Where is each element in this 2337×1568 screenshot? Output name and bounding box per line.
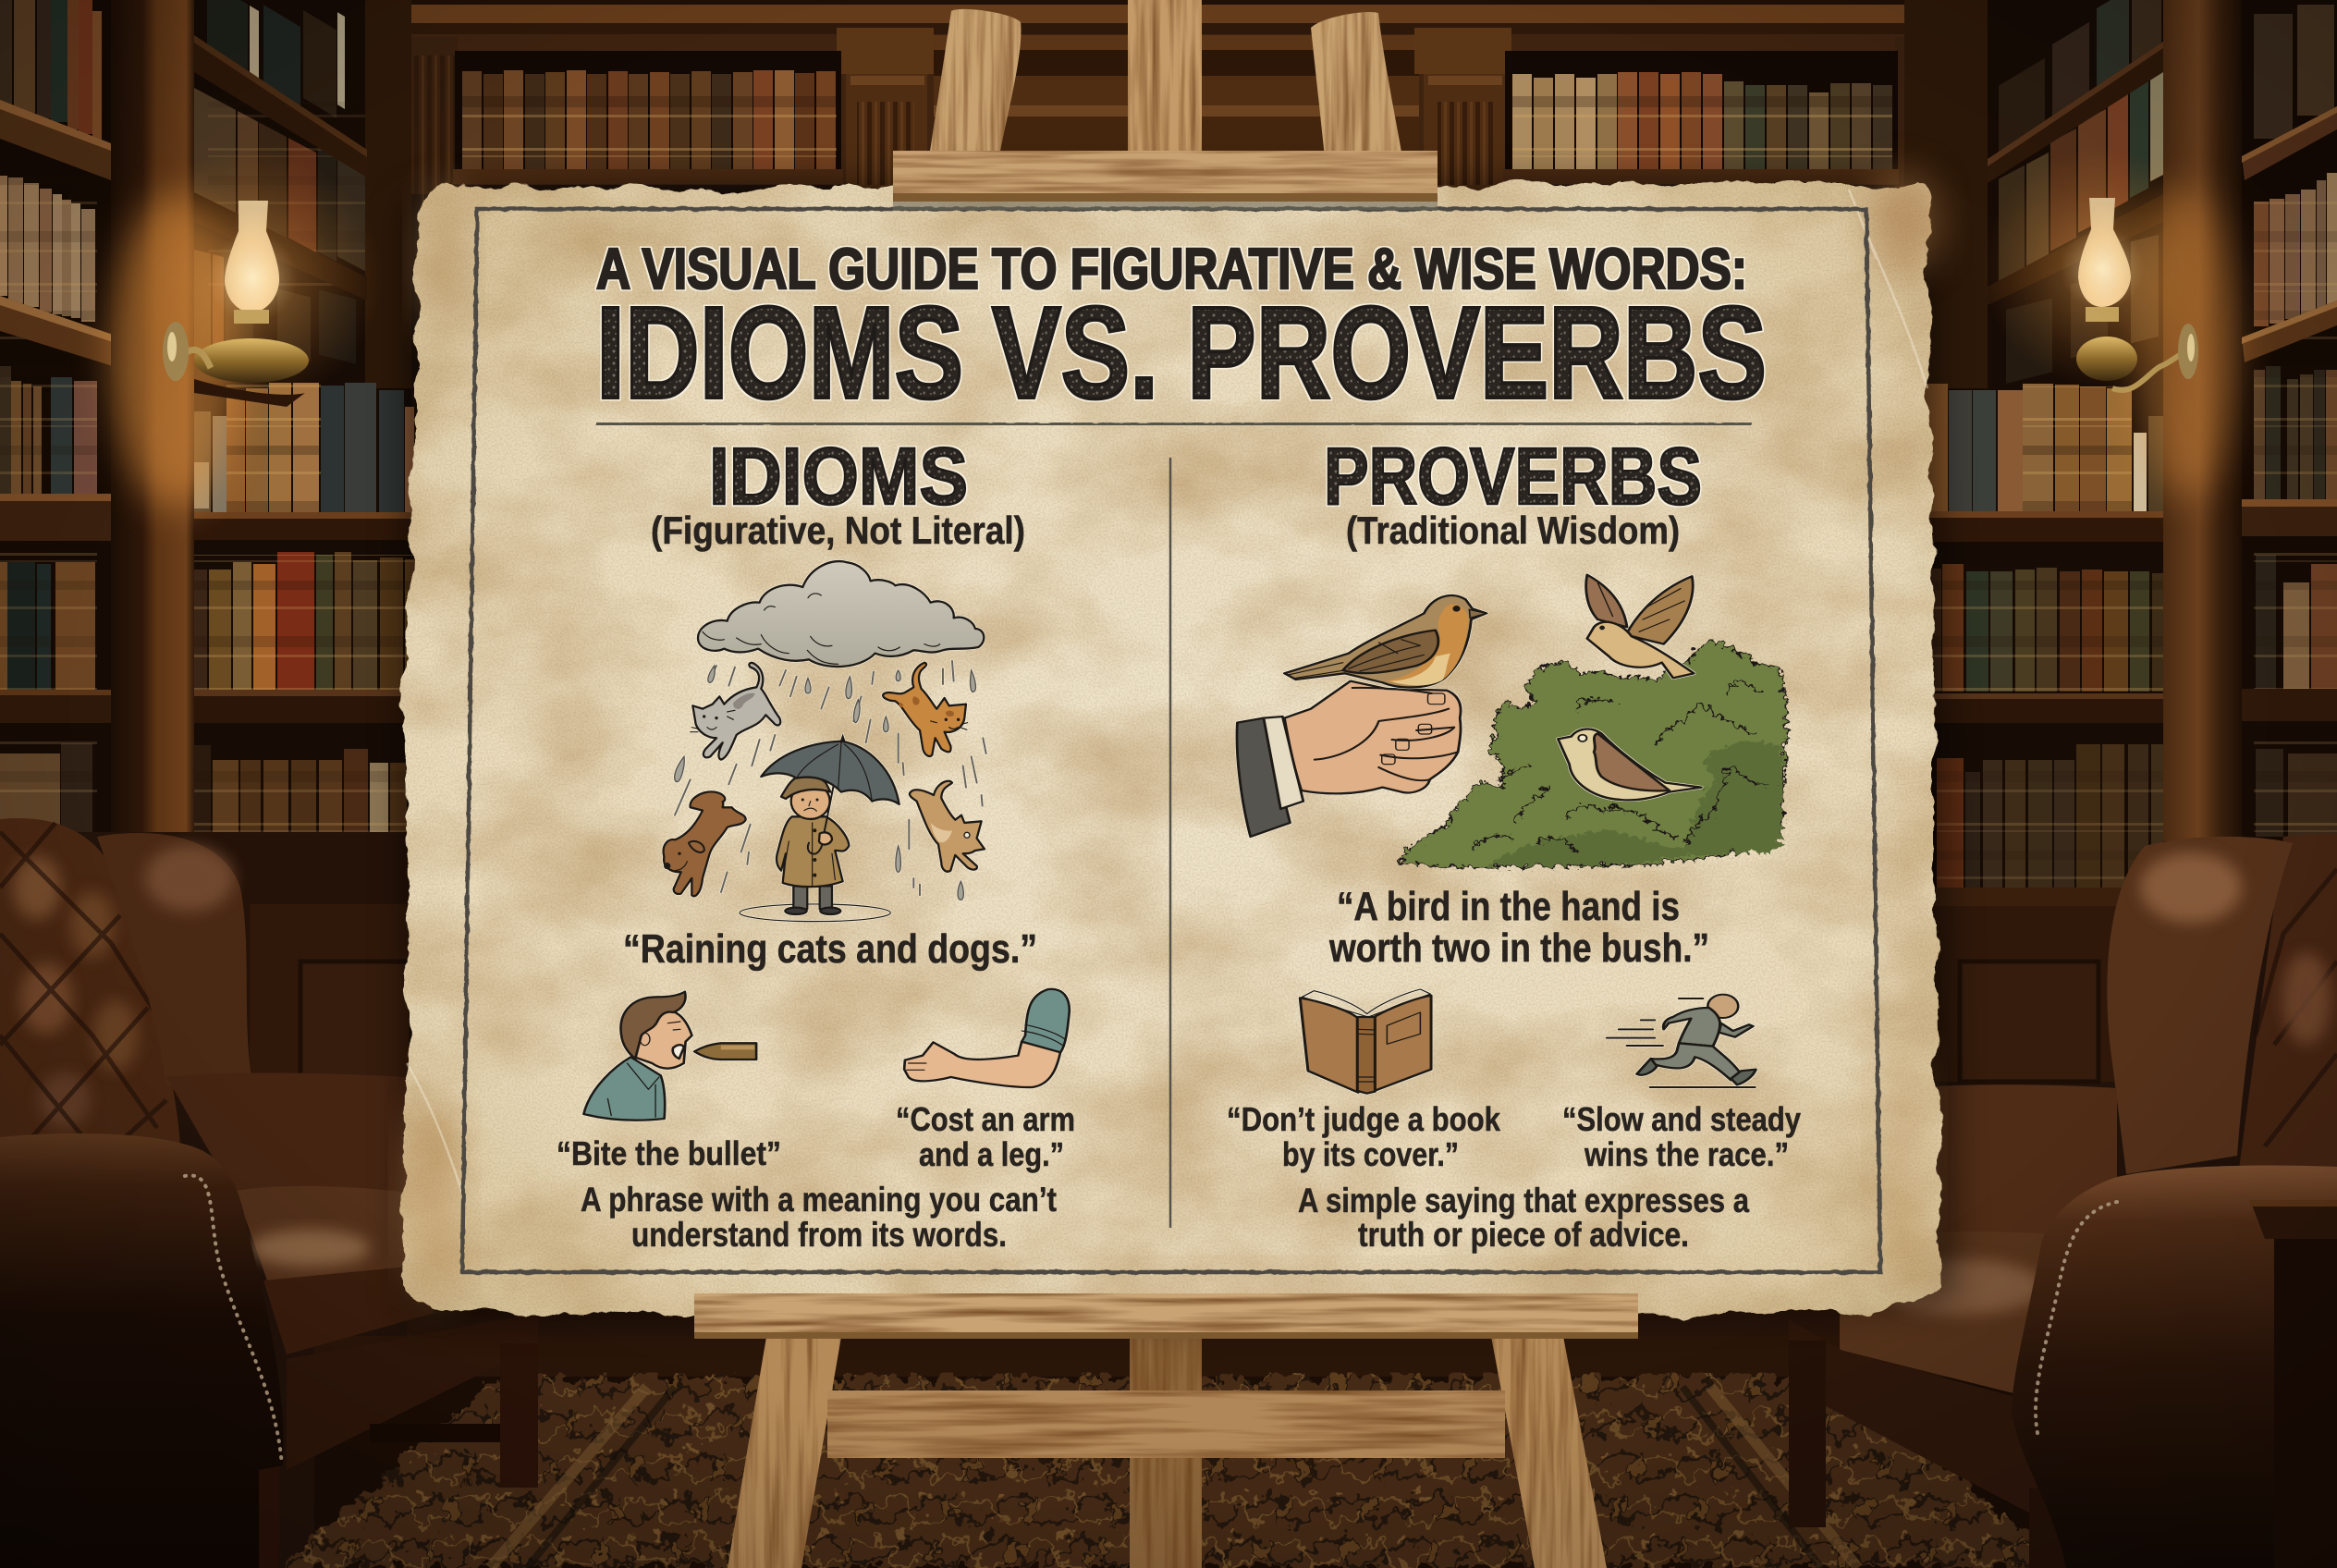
easel left leg	[728, 1331, 842, 1568]
illustration: bite the bullet	[583, 989, 1070, 1121]
cabinets below shelves	[111, 832, 2177, 1568]
chair cushion front	[263, 1267, 434, 1354]
easel: top crossbar	[893, 151, 1438, 202]
cloud	[698, 561, 984, 667]
bird on hand	[1284, 595, 1487, 688]
column divider	[1169, 458, 1171, 1228]
right chair wing	[2107, 837, 2293, 1174]
bookcase: left near lamp	[190, 0, 416, 906]
right chair legs	[1789, 1341, 2066, 1568]
easel tray	[694, 1293, 1638, 1339]
pillar: left	[111, 0, 194, 832]
bird in bush	[1558, 729, 1701, 800]
quote: slow and steady	[1562, 1100, 1801, 1173]
pillar: right	[2163, 0, 2242, 841]
chair cushion	[236, 1186, 409, 1283]
parchment sheet	[401, 171, 1952, 1319]
quote: slow and steady: wins the race.”	[1584, 1135, 1789, 1173]
right chair back	[2237, 834, 2337, 1183]
side table	[2250, 1200, 2337, 1568]
chair wing	[97, 833, 251, 1086]
book	[1300, 989, 1431, 1094]
quote: cost an arm	[896, 1100, 1075, 1173]
chair: left leather armchair	[0, 818, 538, 1568]
quote: raining cats and dogs: “Raining cats and dogs.”	[623, 926, 1037, 972]
quote: cost an arm: and a leg.”	[919, 1135, 1064, 1173]
heading: proverbs: PROVERBS	[1324, 432, 1702, 521]
definition: proverb: truth or piece of advice.	[1358, 1216, 1689, 1254]
chair rail	[287, 1313, 538, 1470]
chair back tufted	[0, 818, 180, 1146]
right chair near arm	[2012, 1165, 2337, 1568]
bush	[1398, 640, 1783, 864]
quote: bird in the hand: “A bird in the hand is	[1337, 884, 1680, 929]
definition: proverb	[1298, 1182, 1749, 1254]
nail trim	[185, 1175, 282, 1465]
shelves: right near lamp	[1927, 511, 2168, 906]
bullet	[694, 1043, 756, 1060]
definition: idiom: A phrase with a meaning you can’t	[581, 1181, 1057, 1219]
pillar: centre left	[837, 28, 934, 194]
shelf boards far right	[2242, 106, 2337, 721]
age stains	[409, 171, 1941, 1304]
lamp: right	[1982, 148, 2237, 499]
easel: rear posts	[929, 0, 1402, 1568]
brown dog	[664, 791, 746, 896]
right nail trim	[2036, 1202, 2117, 1438]
pillar: centre right	[1414, 28, 1511, 194]
title: overline: A VISUAL GUIDE TO FIGURATIVE & WISE WORDS:	[596, 238, 1747, 301]
shadow under top bar	[893, 200, 1438, 210]
flying bird	[1586, 575, 1694, 678]
quote: bird in the hand	[1328, 884, 1709, 971]
easel lower centre post	[1130, 1331, 1202, 1568]
easel: lower legs and tray	[694, 1293, 1638, 1568]
quote: bird in the hand: worth two in the bush.”	[1328, 925, 1709, 971]
rug	[277, 1377, 2062, 1568]
easel right leg	[1490, 1331, 1607, 1568]
paper body	[401, 182, 1941, 1317]
definition: proverb: A simple saying that expresses a	[1298, 1182, 1749, 1219]
wood column: right fluted	[1895, 37, 1988, 222]
chair far arm	[166, 1072, 409, 1197]
right chair base	[1789, 1319, 2071, 1535]
panel: idioms	[557, 432, 1075, 1254]
bookshelf: top centre right	[1503, 51, 1899, 184]
easel centre post	[1128, 0, 1202, 157]
books row: lamp shelf	[192, 383, 414, 512]
easel left post	[929, 9, 1021, 157]
quote: dont judge a book	[1227, 1100, 1501, 1173]
books row: right lamp shelf	[1923, 384, 2163, 511]
wood column: left fluted	[365, 37, 458, 194]
bookshelf: top centre left	[453, 51, 843, 184]
subheading: idioms: (Figurative, Not Literal)	[651, 508, 1025, 552]
subheading: proverbs: (Traditional Wisdom)	[1346, 508, 1680, 552]
tan animal	[910, 781, 985, 872]
inner frame border	[462, 209, 1880, 1272]
orange cat	[883, 663, 968, 756]
right chair far arm	[1789, 1084, 2117, 1239]
easel lower crossbar	[827, 1390, 1505, 1458]
illustration: book and runner	[1300, 989, 1756, 1094]
quote: slow and steady: “Slow and steady	[1562, 1100, 1801, 1138]
easel right post	[1311, 12, 1402, 157]
illustration: bird in hand and bush	[1237, 575, 1783, 864]
heading: idioms: IDIOMS	[709, 432, 968, 521]
man with umbrella	[740, 733, 899, 922]
grey cat	[691, 663, 780, 760]
bookcase: far left	[0, 0, 116, 832]
arm	[904, 1042, 1060, 1087]
definition: idiom: understand from its words.	[631, 1216, 1007, 1254]
bookcase: far right	[2237, 0, 2337, 841]
quote: cost an arm: “Cost an arm	[896, 1100, 1075, 1138]
runner	[1607, 995, 1756, 1087]
hand with cuff	[1237, 681, 1461, 837]
title: main heading: IDIOMS VS. PROVERBS	[596, 279, 1767, 425]
shelf boards	[0, 100, 116, 723]
bookcase: right near lamp	[1904, 0, 2168, 906]
quote: dont judge a book: “Don’t judge a book	[1227, 1100, 1501, 1138]
creases	[407, 190, 1927, 1193]
shelves: left near lamp	[192, 512, 414, 904]
chair legs	[257, 1343, 538, 1568]
quote: dont judge a book: by its cover.”	[1282, 1135, 1459, 1173]
right chair cushion	[1840, 1231, 2087, 1401]
lamp: left	[111, 148, 382, 508]
quote: bite the bullet: “Bite the bullet”	[557, 1134, 781, 1172]
chair: right leather armchair	[1789, 834, 2337, 1568]
panel: proverbs	[1227, 432, 1801, 1254]
rain	[675, 661, 986, 900]
illustration: raining cats and dogs	[664, 561, 986, 922]
chair near arm	[0, 1133, 284, 1568]
title divider	[596, 423, 1752, 425]
definition: idiom	[581, 1181, 1057, 1254]
